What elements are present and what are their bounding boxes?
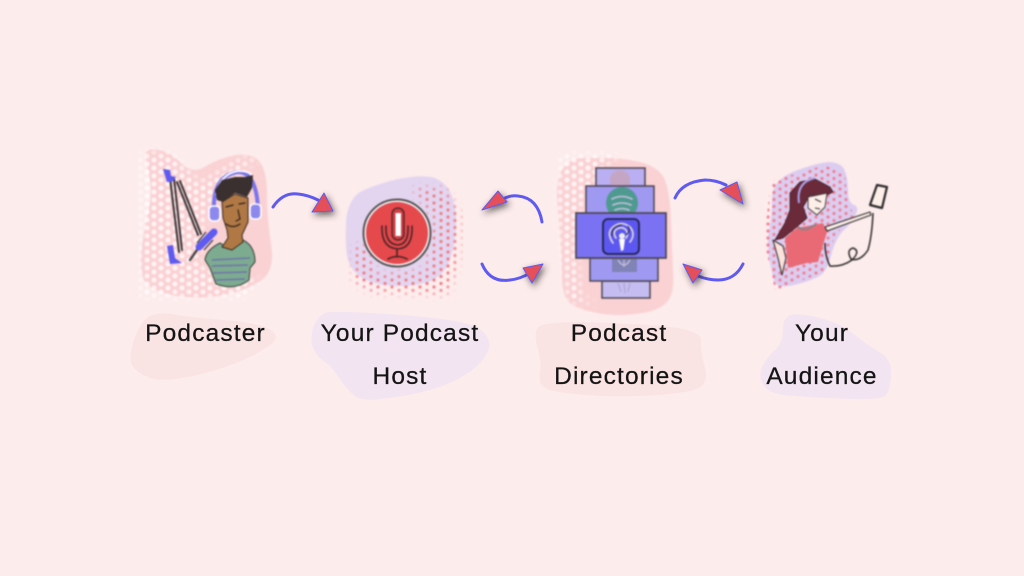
arrow: host to directories xyxy=(482,264,543,283)
microphone capsule xyxy=(392,208,404,240)
hair xyxy=(215,175,253,202)
card: lower directory xyxy=(590,258,658,281)
halftone: white dots xyxy=(558,156,616,305)
label text: Your Podcast xyxy=(321,320,479,347)
label blob xyxy=(312,312,489,400)
figure: woman with phone xyxy=(773,178,887,275)
phone xyxy=(870,185,887,208)
label: podcast directories xyxy=(536,320,706,396)
facial features xyxy=(815,199,821,209)
card: bottom directory xyxy=(602,281,650,298)
blob: directories background xyxy=(557,158,673,315)
hair xyxy=(775,179,833,240)
icon: microphone boom stand xyxy=(163,169,201,264)
arrow: podcaster to host xyxy=(273,193,333,212)
face xyxy=(808,193,827,215)
icon: red microphone badge xyxy=(364,200,430,266)
face xyxy=(222,194,248,250)
panel: audience illustration xyxy=(764,162,887,290)
label blob xyxy=(536,322,706,396)
blob: podcaster background xyxy=(141,149,272,298)
label text second line: Directories xyxy=(554,363,684,390)
label text second line: Audience xyxy=(766,363,878,390)
arrow: audience to directories xyxy=(683,264,743,283)
icon: microphone xyxy=(190,232,214,260)
headphone band highlight xyxy=(216,171,252,195)
label text: Podcaster xyxy=(145,320,266,347)
shirt xyxy=(785,223,827,268)
card: spotify-style directory xyxy=(586,186,654,219)
label blob xyxy=(760,314,891,399)
panel: podcast directories illustration xyxy=(556,156,674,316)
halftone: white dots xyxy=(140,150,254,298)
shirt stripes xyxy=(212,258,250,280)
facial features xyxy=(226,203,245,226)
headphone band xyxy=(214,172,258,212)
figure: podcaster person xyxy=(205,171,261,287)
card: main apple podcasts directory xyxy=(576,213,666,258)
label: your audience xyxy=(760,314,891,399)
arrow: directories to host xyxy=(482,191,542,222)
card: top directory xyxy=(596,168,645,190)
label text second line: Host xyxy=(373,363,427,390)
panel: podcast host illustration xyxy=(346,176,464,298)
arrow: directories to audience xyxy=(675,180,743,204)
back arm xyxy=(773,240,786,275)
label: podcaster xyxy=(130,313,276,380)
label blob xyxy=(130,313,276,380)
collar xyxy=(798,224,816,229)
arm xyxy=(825,212,871,231)
headphone band xyxy=(799,178,815,203)
panel: podcaster illustration xyxy=(140,149,272,298)
microphone cradle xyxy=(382,226,412,259)
icon: podcast app xyxy=(603,219,639,254)
label: your podcast host xyxy=(312,312,489,400)
label text: Podcast xyxy=(571,320,667,347)
halftone: red dots xyxy=(349,184,464,298)
shirt xyxy=(205,240,255,287)
ear cups xyxy=(209,204,261,221)
halftone: red dots xyxy=(764,165,855,290)
blob: audience background xyxy=(768,162,857,286)
headphone cable xyxy=(825,213,873,266)
label text: Your xyxy=(795,320,849,347)
blob: host background xyxy=(346,176,456,286)
